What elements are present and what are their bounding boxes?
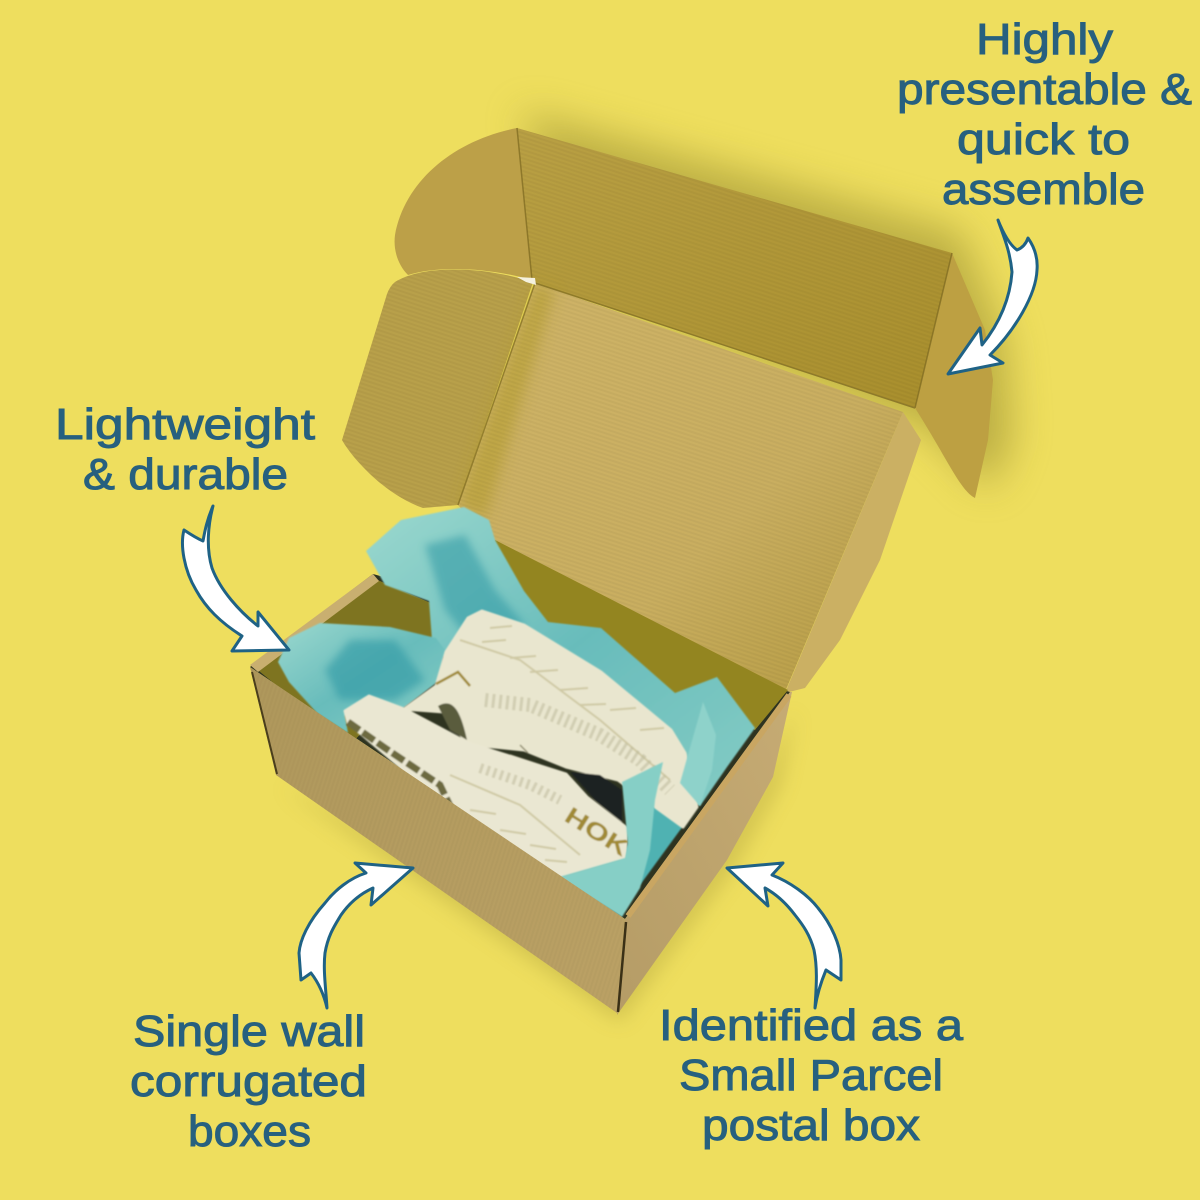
shoe: back: [404, 611, 697, 827]
shoe: dark gap: [570, 772, 622, 822]
box: corner dark edge: [618, 922, 626, 1012]
lid: back panel: [517, 128, 952, 408]
callout: highly presentable: [897, 15, 1192, 214]
shoe: back stripes: [460, 626, 670, 780]
tissue: low fill beside shoe: [620, 790, 683, 885]
tissue: left sheet: [278, 623, 445, 733]
callout: single wall: boxes: [188, 1107, 311, 1156]
callout: lightweight: & durable: [83, 450, 288, 499]
arrow: left: [182, 506, 289, 651]
tissue paper back: [278, 507, 755, 885]
lid: fold lines: [458, 128, 952, 505]
shoe: front stripes: [450, 775, 580, 862]
callout: highly presentable: quick to: [957, 115, 1130, 164]
interior: rim left: [250, 574, 379, 672]
box: front left dark edge: [252, 672, 277, 774]
shoes: [345, 611, 697, 877]
shoe: front knit pattern: [480, 768, 560, 800]
shoe: HOKA logo: HOK: [560, 802, 634, 863]
lid: inner left flap: [342, 270, 533, 508]
tissue: back sheet: [366, 507, 755, 806]
cardboard box: [250, 667, 792, 1015]
lid: inner main panel corrugation: [458, 283, 903, 692]
interior: floor: [250, 574, 790, 919]
tissue: right fold: [680, 702, 716, 806]
shoe: back knit pattern: [485, 700, 670, 790]
lid: inner left flap corrugation: [342, 270, 533, 508]
interior: left wall: [254, 578, 470, 745]
lid: back top flap left: [395, 128, 532, 280]
box: front face: [250, 667, 625, 1013]
callout: lightweight: [55, 400, 315, 499]
box: right rim: [628, 695, 789, 916]
lid shadow: [520, 112, 1012, 490]
callout: single wall: corrugated: [130, 1057, 367, 1106]
lid: back top flap right: [915, 253, 993, 498]
callout: small parcel: Identified as a: [659, 1001, 964, 1050]
callout: small parcel: postal box: [702, 1101, 920, 1150]
lid: inner main panel shading near fold: [458, 283, 555, 520]
box: front face corrugation: [250, 667, 625, 1013]
box: right face: [617, 692, 792, 1015]
callout: single wall: [130, 1007, 367, 1156]
shoe: laces: [510, 745, 560, 777]
callout: small parcel: [659, 1001, 964, 1150]
box ground shadow: [280, 710, 795, 1022]
tissue: back sheet dark fold: [425, 535, 525, 640]
callout: lightweight: Lightweight: [55, 400, 315, 449]
callout: highly presentable: Highly: [976, 15, 1113, 64]
interior: far wall: [470, 540, 788, 730]
callout: small parcel: Small Parcel: [679, 1051, 943, 1100]
tissue: front sheet: [559, 762, 663, 917]
callout: highly presentable: presentable &: [897, 65, 1192, 114]
box interior: [250, 540, 790, 919]
arrow: bottom left: [299, 863, 413, 1008]
arrow: bottom right: [727, 863, 841, 1008]
lid: white corner gap: [517, 277, 536, 285]
shoe: back collar opening: [438, 703, 467, 740]
lid: inner right flap: [785, 412, 921, 693]
tissue paper front: [559, 702, 716, 917]
shoe: front sole: [348, 722, 452, 810]
shoe: front: [345, 696, 634, 877]
shoe: back logo: [436, 672, 470, 686]
lid: inner main panel: [458, 283, 903, 692]
open lid: [342, 128, 993, 693]
tissue: left sheet dark fold: [325, 640, 425, 700]
lid: back panel corrugation: [517, 128, 952, 408]
arrow: top right: [948, 220, 1037, 374]
callout: single wall: Single wall: [133, 1007, 365, 1056]
callout: highly presentable: assemble: [942, 165, 1145, 214]
